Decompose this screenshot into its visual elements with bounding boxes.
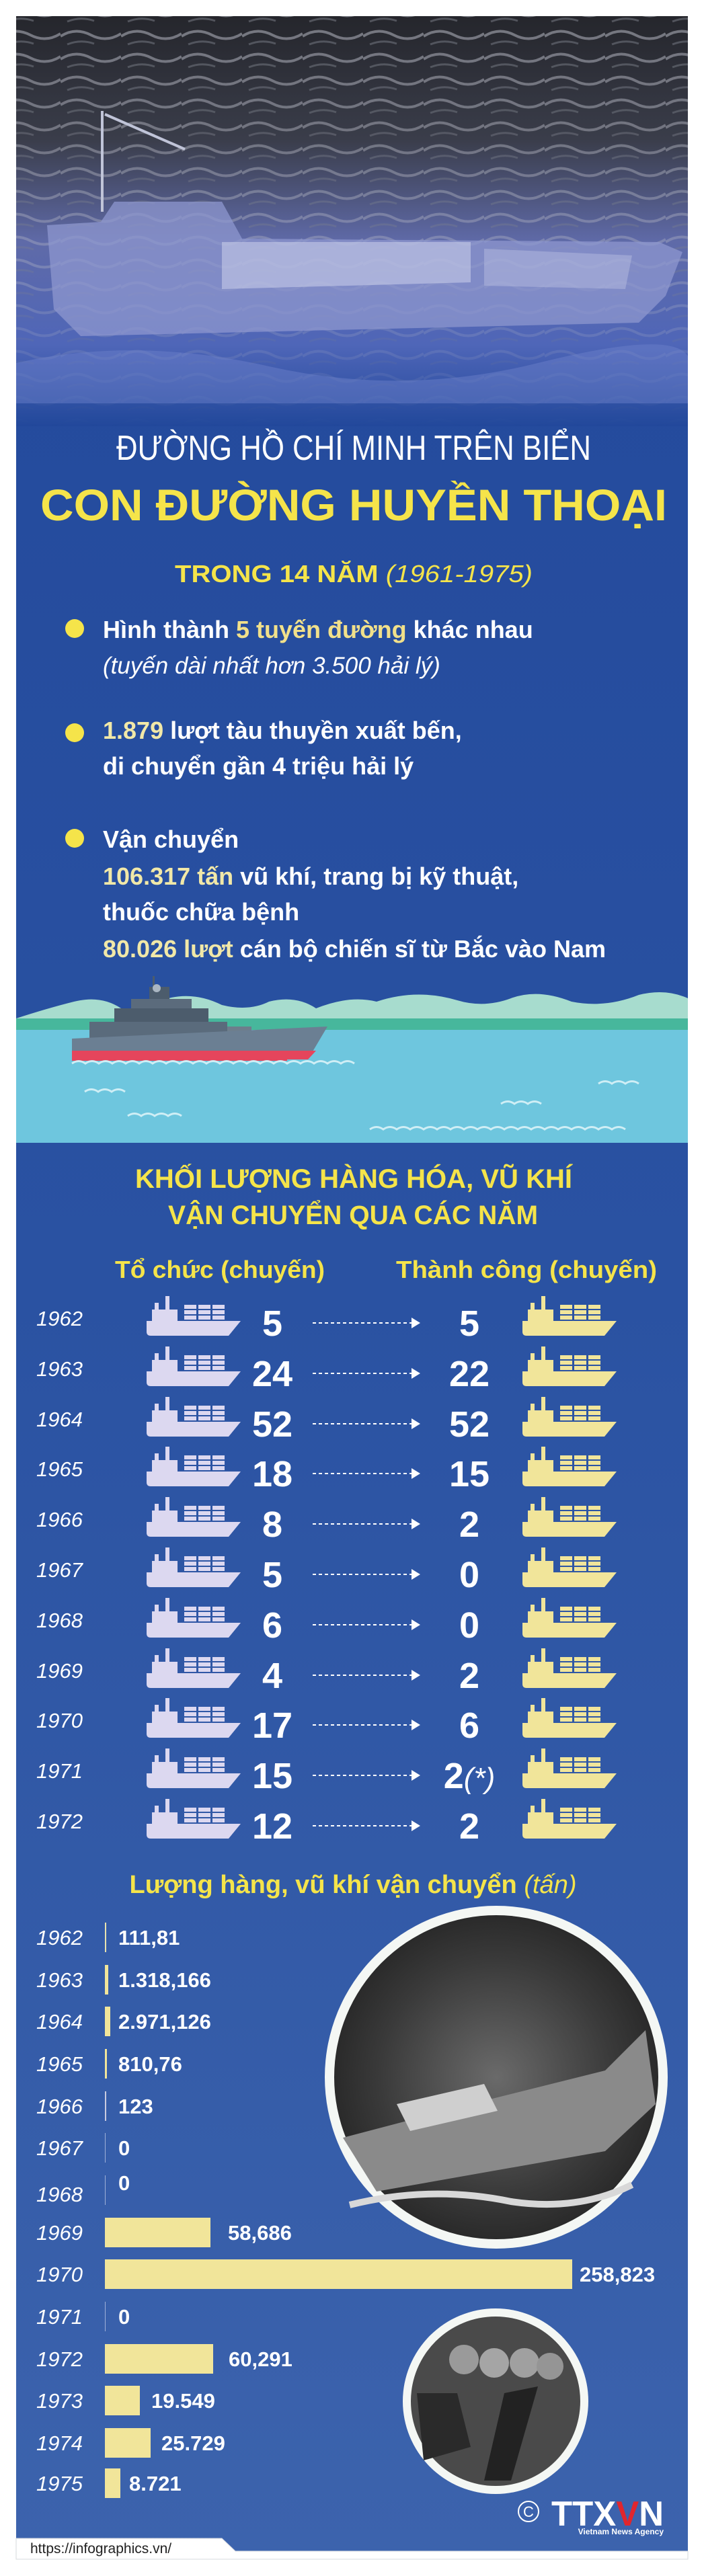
1975: 1975 bbox=[36, 2472, 83, 2495]
logo: TTXVN: C bbox=[523, 2503, 534, 2520]
1973: 1973 bbox=[36, 2389, 83, 2413]
row 1967: 1967 bbox=[36, 1558, 84, 1582]
1968: 1968 bbox=[36, 2183, 83, 2206]
1962 bbox=[36, 1923, 180, 1952]
1971: 1971 bbox=[36, 2305, 83, 2329]
1966: 1966 bbox=[36, 2095, 83, 2118]
title: subtitle: ĐƯỜNG HỒ CHÍ MINH TRÊN BIỂN bbox=[116, 428, 591, 468]
1967: 0 bbox=[118, 2136, 130, 2160]
1972: 60,291 bbox=[229, 2347, 292, 2371]
1967 bbox=[36, 2133, 130, 2163]
1972: 1972 bbox=[36, 2347, 83, 2371]
row 1967: 0 bbox=[459, 1555, 479, 1595]
row 1962 bbox=[36, 1296, 617, 1344]
row 1962: 5 bbox=[262, 1303, 282, 1344]
row 1971: 15 bbox=[252, 1756, 292, 1796]
row 1965 bbox=[36, 1447, 617, 1494]
row 1971 bbox=[36, 1748, 617, 1796]
bar chart: tonnage by year bbox=[36, 1923, 655, 2498]
title: main: CON ĐƯỜNG HUYỀN THOẠI bbox=[40, 480, 667, 530]
1973 bbox=[36, 2386, 215, 2415]
1974: 1974 bbox=[36, 2431, 83, 2455]
1965: 810,76 bbox=[118, 2052, 182, 2076]
row 1963 bbox=[36, 1346, 617, 1394]
row 1964: 52 bbox=[252, 1404, 292, 1445]
bullet 1: Hình thành 5 tuyến đường khác nhau bbox=[103, 616, 533, 643]
bullet list bbox=[65, 616, 606, 963]
bullet 2: di chuyển gần 4 triệu hải lý bbox=[103, 752, 414, 780]
footer: url tab bbox=[16, 2538, 688, 2559]
bullet 3: thuốc chữa bệnh bbox=[103, 898, 299, 926]
1970 bbox=[36, 2259, 655, 2289]
1964 bbox=[36, 2007, 211, 2036]
section heading: trips bbox=[135, 1163, 573, 1230]
trip table bbox=[36, 1296, 617, 1847]
1968: 0 bbox=[118, 2171, 130, 2195]
row 1970: 6 bbox=[459, 1705, 479, 1746]
row 1972 bbox=[36, 1799, 617, 1847]
row 1971: 2(*) bbox=[444, 1756, 495, 1796]
1974 bbox=[36, 2428, 225, 2458]
bullet 3 bbox=[65, 826, 606, 963]
sea illustration with warship bbox=[16, 976, 688, 1143]
row 1967: 5 bbox=[262, 1555, 282, 1595]
row 1964: 1964 bbox=[36, 1408, 83, 1431]
header photo: boat at sea bbox=[16, 16, 688, 426]
photo circle: fuel drums unloading bbox=[403, 2308, 588, 2494]
row 1968: 0 bbox=[459, 1605, 479, 1646]
1968 bbox=[36, 2171, 130, 2206]
1965: 1965 bbox=[36, 2052, 83, 2076]
bullet 2 bbox=[65, 717, 462, 780]
section heading: tonnage: Lượng hàng, vũ khí vận chuyển (tấn) bbox=[129, 1871, 577, 1899]
row 1966 bbox=[36, 1497, 617, 1545]
1963: 1.318,166 bbox=[118, 1968, 211, 1992]
1970: 258,823 bbox=[580, 2263, 655, 2286]
row 1968: 6 bbox=[262, 1605, 282, 1646]
bullet 3: 80.026 lượt cán bộ chiến sĩ từ Bắc vào Nam bbox=[103, 934, 606, 963]
row 1970: 17 bbox=[252, 1705, 292, 1746]
1966: 123 bbox=[118, 2095, 153, 2118]
column header: organised: Tổ chức (chuyến) bbox=[115, 1256, 325, 1283]
logo: TTXVN: Vietnam News Agency bbox=[578, 2527, 664, 2536]
section heading: trips: VẬN CHUYỂN QUA CÁC NĂM bbox=[168, 1199, 538, 1230]
row 1966: 2 bbox=[459, 1504, 479, 1545]
row 1969: 1969 bbox=[36, 1659, 83, 1683]
row 1966: 1966 bbox=[36, 1508, 83, 1531]
row 1970: 1970 bbox=[36, 1709, 83, 1732]
1964: 1964 bbox=[36, 2010, 83, 2034]
bullet 2: 1.879 lượt tàu thuyền xuất bến, bbox=[103, 717, 462, 744]
row 1965: 15 bbox=[449, 1454, 490, 1494]
column header: successful: Thành công (chuyến) bbox=[396, 1256, 657, 1283]
row 1970 bbox=[36, 1698, 617, 1746]
subtitle: period: TRONG 14 NĂM (1961-1975) bbox=[175, 560, 533, 588]
1975 bbox=[36, 2468, 182, 2498]
footer: url tab: https://infographics.vn/ bbox=[30, 2541, 171, 2557]
1966 bbox=[36, 2091, 153, 2121]
row 1962: 5 bbox=[459, 1303, 479, 1344]
photo circle: cargo boat bbox=[325, 1906, 668, 2249]
1971: 0 bbox=[118, 2305, 130, 2329]
row 1965: 18 bbox=[252, 1454, 292, 1494]
row 1964 bbox=[36, 1397, 617, 1445]
1973: 19.549 bbox=[151, 2389, 215, 2413]
row 1969: 4 bbox=[262, 1656, 282, 1696]
1975: 8.721 bbox=[129, 2472, 182, 2495]
bullet 3: Vận chuyển bbox=[103, 826, 239, 853]
row 1971: 1971 bbox=[36, 1759, 83, 1783]
1971 bbox=[36, 2302, 130, 2331]
1969 bbox=[36, 2218, 292, 2247]
row 1963: 22 bbox=[449, 1354, 490, 1394]
row 1972: 1972 bbox=[36, 1810, 83, 1833]
1963 bbox=[36, 1965, 211, 1995]
row 1964: 52 bbox=[449, 1404, 490, 1445]
row 1965: 1965 bbox=[36, 1457, 83, 1481]
1965 bbox=[36, 2049, 182, 2079]
logo: TTXVN: TTXVN bbox=[551, 2495, 664, 2534]
row 1966: 8 bbox=[262, 1504, 282, 1545]
1974: 25.729 bbox=[161, 2431, 225, 2455]
row 1972: 2 bbox=[459, 1806, 479, 1847]
1963: 1963 bbox=[36, 1968, 83, 1992]
1962: 111,81 bbox=[118, 1926, 180, 1949]
row 1969 bbox=[36, 1648, 617, 1696]
1969: 58,686 bbox=[228, 2221, 292, 2245]
row 1969: 2 bbox=[459, 1656, 479, 1696]
1967: 1967 bbox=[36, 2136, 84, 2160]
1972 bbox=[36, 2344, 292, 2374]
bullet 1 bbox=[65, 616, 533, 679]
warship bbox=[72, 976, 327, 1061]
row 1962: 1962 bbox=[36, 1307, 83, 1330]
bullet 3: 106.317 tấn vũ khí, trang bị kỹ thuật, bbox=[103, 862, 518, 890]
row 1967 bbox=[36, 1547, 617, 1595]
row 1963: 24 bbox=[252, 1354, 292, 1394]
section heading: trips: KHỐI LƯỢNG HÀNG HÓA, VŨ KHÍ bbox=[135, 1163, 573, 1194]
bullet 1: (tuyến dài nhất hơn 3.500 hải lý) bbox=[103, 653, 440, 679]
1969: 1969 bbox=[36, 2221, 83, 2245]
row 1963: 1963 bbox=[36, 1357, 83, 1381]
row 1968: 1968 bbox=[36, 1609, 83, 1632]
1970: 1970 bbox=[36, 2263, 83, 2286]
1964: 2.971,126 bbox=[118, 2010, 211, 2034]
row 1972: 12 bbox=[252, 1806, 292, 1847]
row 1968 bbox=[36, 1598, 617, 1646]
1962: 1962 bbox=[36, 1926, 83, 1949]
